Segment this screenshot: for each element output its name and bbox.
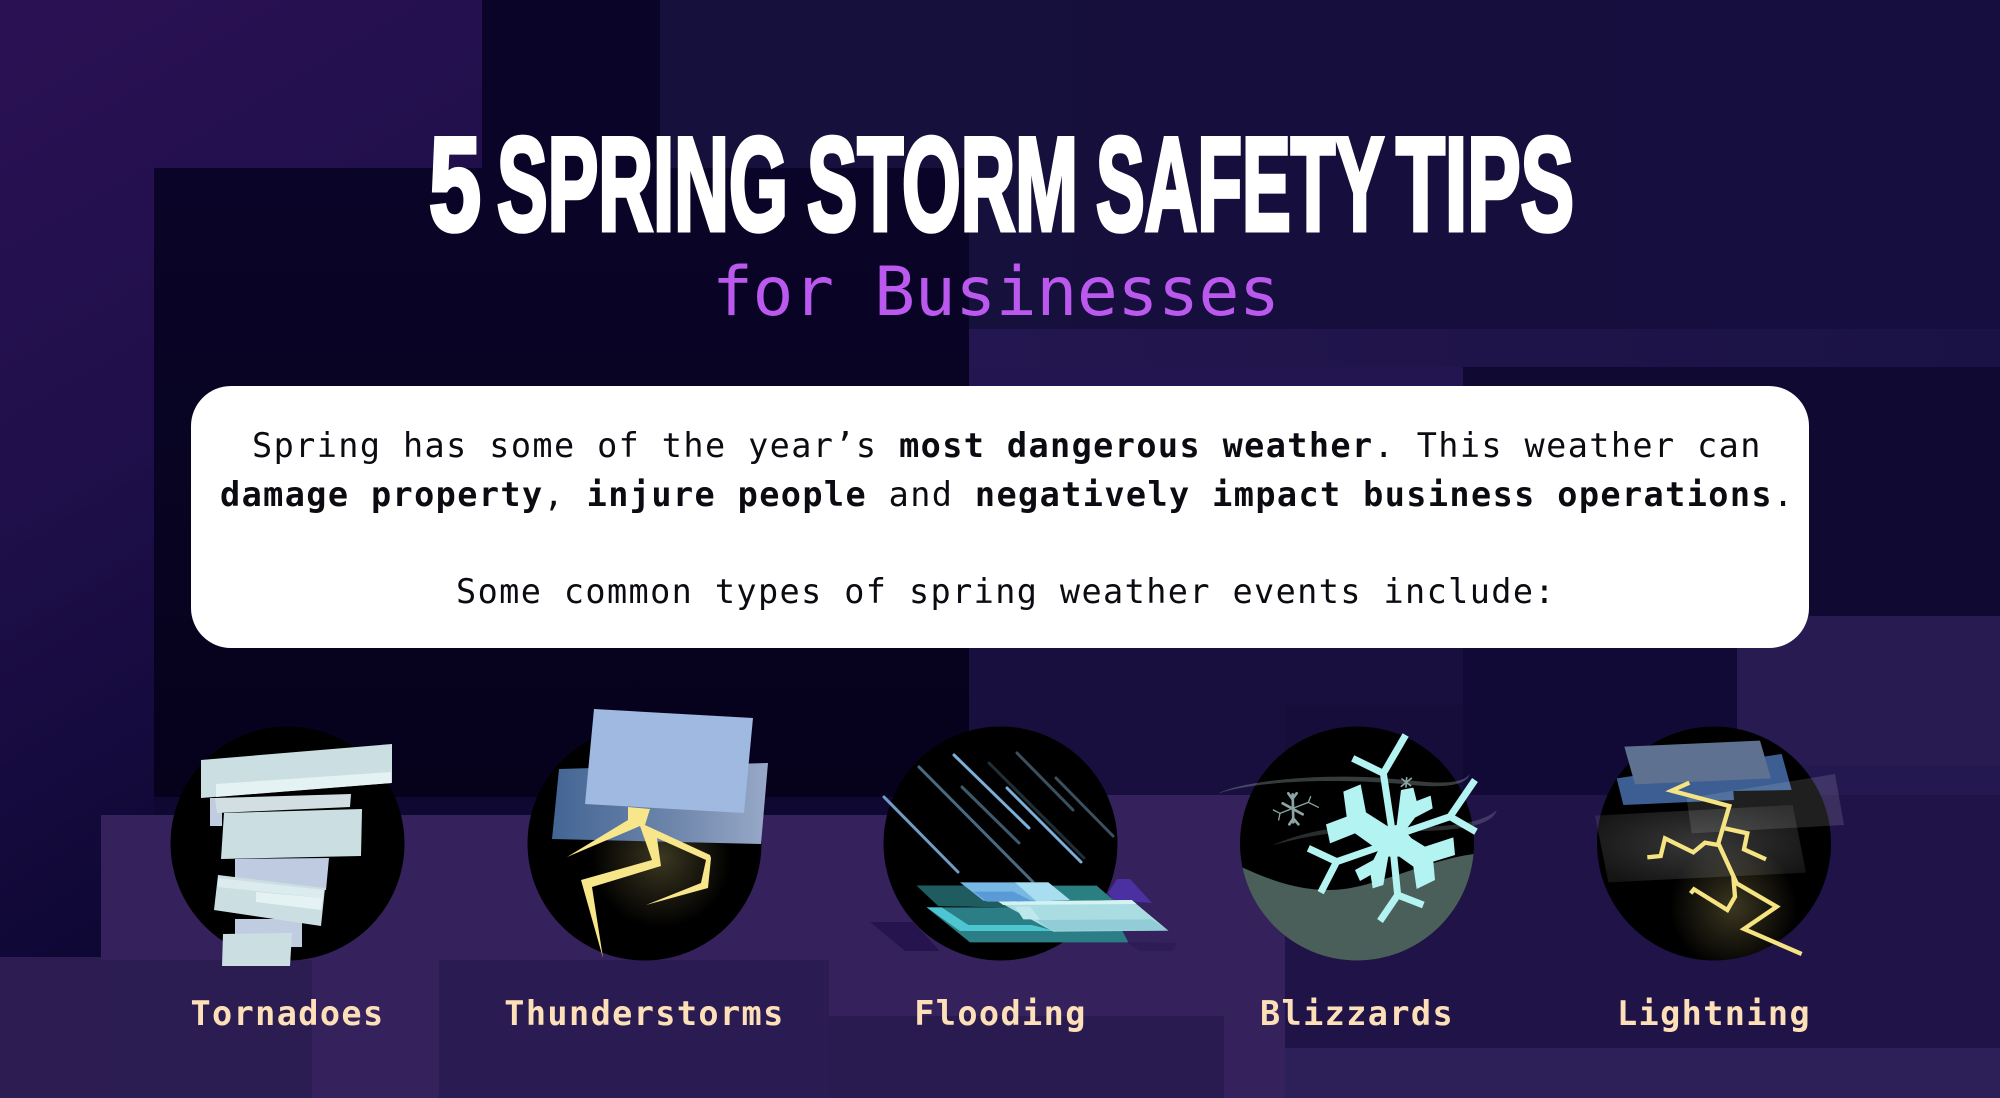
title: SPRING bbox=[497, 111, 788, 259]
label: Blizzards: Blizzards bbox=[1260, 994, 1454, 1033]
title: TIPS bbox=[1396, 111, 1574, 259]
title: 5 bbox=[429, 111, 481, 259]
title bbox=[429, 111, 1574, 259]
label: Tornadoes: Tornadoes bbox=[190, 994, 385, 1033]
panel background bbox=[191, 386, 1809, 648]
title: STORM bbox=[807, 111, 1078, 259]
icon: flooding bbox=[870, 726, 1177, 960]
label: Thunderstorms: Thunderstorms bbox=[504, 994, 785, 1033]
title: SAFETY bbox=[1096, 111, 1384, 259]
subtitle: for Businesses bbox=[712, 253, 1280, 332]
icon: lightning bbox=[1595, 727, 1844, 970]
icon: blizzard bbox=[1218, 726, 1497, 968]
intro text line 1: Spring has some of the year’s most dangerous weather. This weather can bbox=[252, 426, 1762, 465]
intro panel bbox=[191, 386, 1809, 648]
intro text line 2: damage property, injure people and negatively impact business operations. bbox=[220, 475, 1795, 514]
intro text line 3: Some common types of spring weather events include: bbox=[456, 572, 1556, 611]
icon: tornado bbox=[170, 726, 404, 966]
icon: thunderstorm bbox=[528, 709, 768, 960]
label: Flooding: Flooding bbox=[914, 994, 1087, 1033]
label: Lightning: Lightning bbox=[1617, 994, 1811, 1033]
